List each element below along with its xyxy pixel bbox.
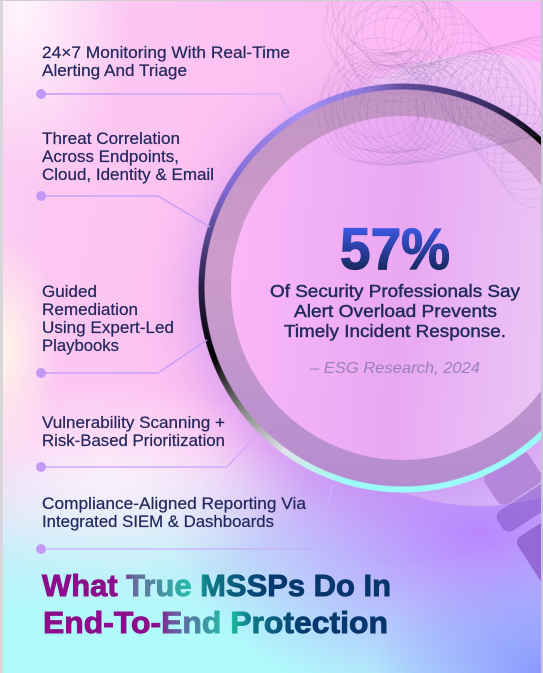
service 4 text [42, 414, 225, 450]
connector 3 [36, 340, 207, 378]
statistic 57%: 57% [340, 217, 450, 282]
magnifier gradient edge [198, 83, 543, 493]
pale halo behind magnifier [254, 54, 543, 506]
soft shadow around magnifier [201, 86, 543, 490]
service 1 text: Alerting And Triage [42, 62, 187, 80]
source citation: – ESG Research, 2024 [309, 360, 480, 377]
statistic description: Of Security Professionals Say [270, 281, 520, 301]
service 3 text: Playbooks [42, 337, 119, 355]
service 3 text: Remediation [42, 301, 138, 319]
service 1 text: 24×7 Monitoring With Real-Time [42, 44, 290, 62]
statistic description: Timely Incident Response. [284, 321, 506, 341]
service 2 text: Cloud, Identity & Email [42, 166, 214, 184]
service 4 text: Risk-Based Prioritization [42, 432, 225, 450]
service 2 text: Threat Correlation [42, 130, 180, 148]
connector 1 [36, 89, 292, 117]
title [42, 568, 391, 640]
service 2 text: Across Endpoints, [42, 148, 179, 166]
service 4 text: Vulnerability Scanning + [42, 414, 225, 432]
service 3 text: Guided [42, 283, 97, 301]
statistic description: Alert Overload Prevents [294, 301, 497, 321]
service 5 text: Compliance-Aligned Reporting Via [42, 495, 307, 513]
service 5 text: Integrated SIEM & Dashboards [42, 513, 274, 531]
magnifier outer rim [201, 86, 543, 490]
connector 4 [36, 433, 258, 472]
connector 5 [36, 484, 333, 554]
service 3 text [42, 283, 174, 355]
service 1 text [42, 44, 290, 80]
connector 2 [36, 191, 210, 227]
service 3 text: Using Expert-Led [42, 319, 174, 337]
title: What True MSSPs Do In [42, 568, 391, 603]
magnifier lens [231, 116, 543, 460]
top page edge [0, 0, 543, 1]
title: End-To-End Protection [43, 605, 388, 640]
left page edge [0, 0, 3, 673]
right page edge [541, 0, 543, 673]
spirograph line pattern [318, 0, 543, 208]
service 2 text [42, 130, 214, 184]
statistic description [270, 281, 520, 341]
service 5 text [42, 495, 307, 531]
